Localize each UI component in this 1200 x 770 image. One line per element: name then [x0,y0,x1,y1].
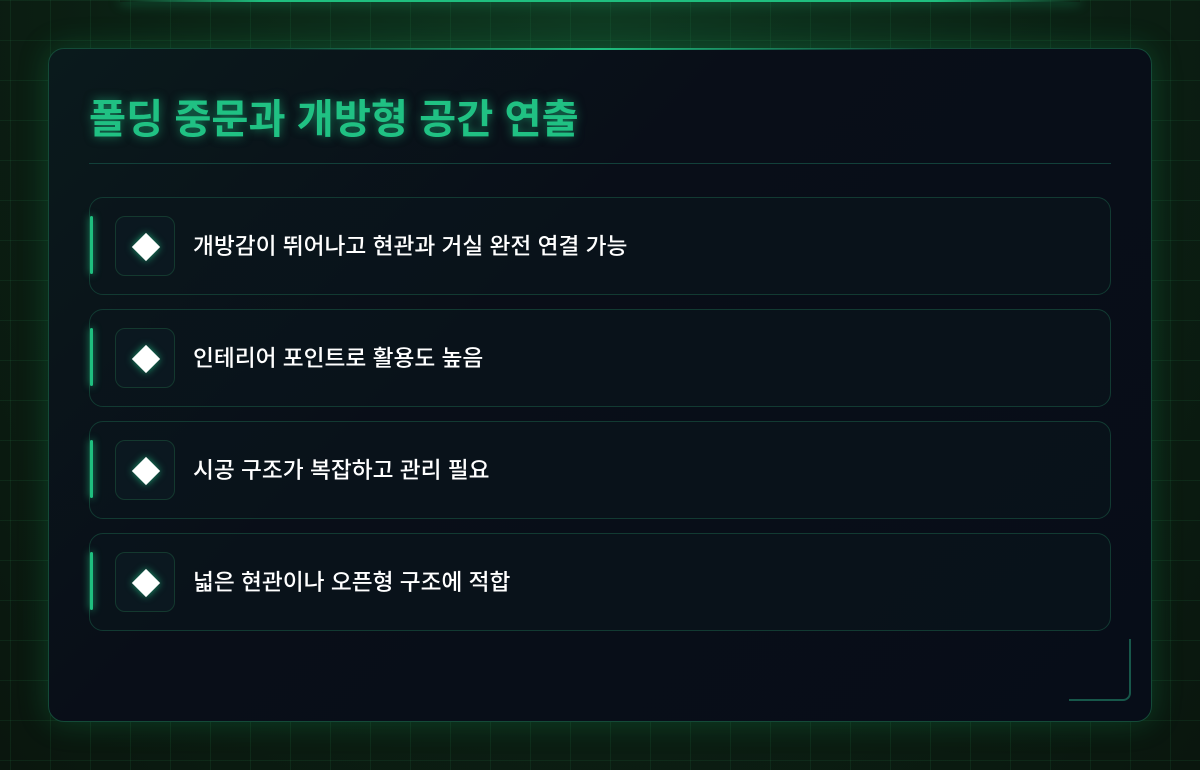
icon: diamond [115,216,175,276]
icon: diamond [115,328,175,388]
item 2 [89,309,1111,407]
item 1 [89,197,1111,295]
text: 시공 구조가 복잡하고 관리 필요 [193,457,490,483]
icon: diamond [115,440,175,500]
icon: diamond [115,552,175,612]
item 3 [89,421,1111,519]
item 4 [89,533,1111,631]
text: 인테리어 포인트로 활용도 높음 [193,345,483,371]
title: 폴딩 중문과 개방형 공간 연출 [89,97,579,142]
corner accent [1069,639,1131,701]
text: 개방감이 뛰어나고 현관과 거실 완전 연결 가능 [193,233,627,259]
text: 넓은 현관이나 오픈형 구조에 적합 [193,569,510,595]
